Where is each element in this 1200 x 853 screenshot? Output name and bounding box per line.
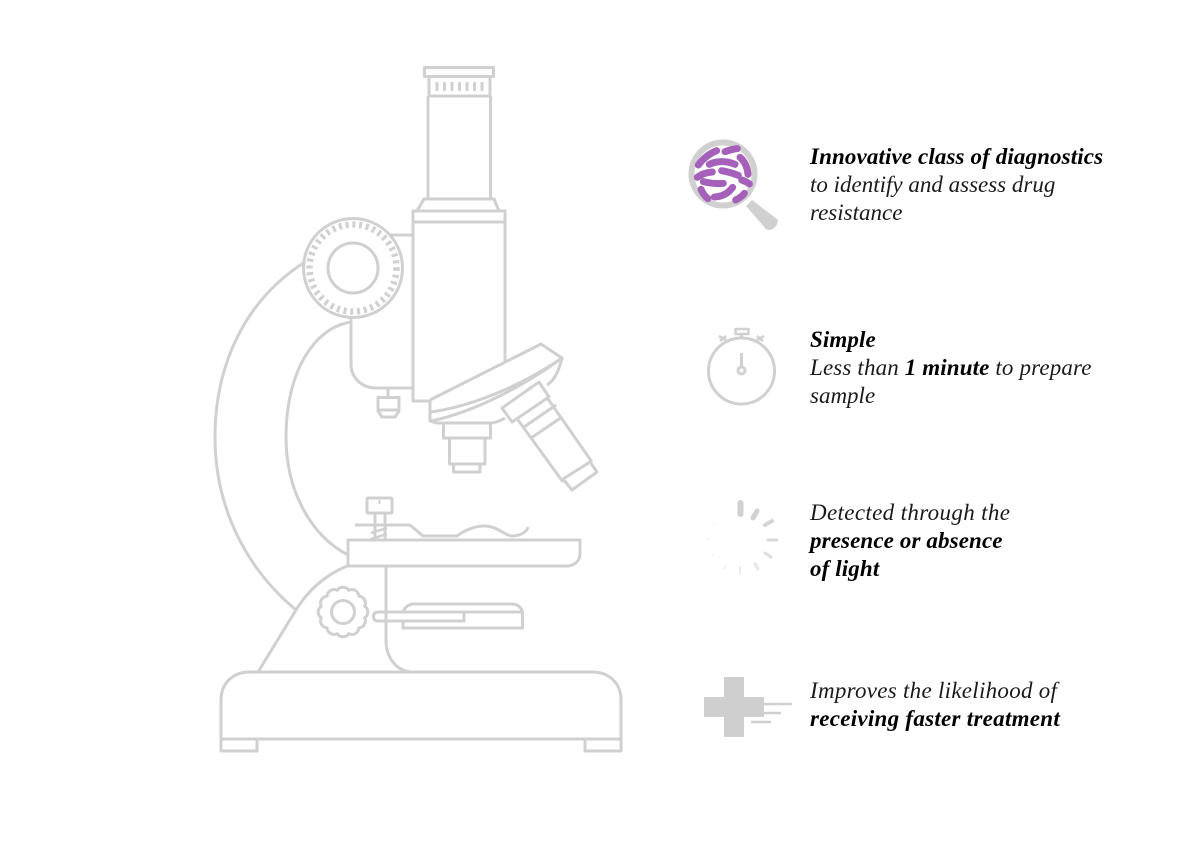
text: innovative class of diagnostics: resistance [810, 200, 902, 225]
icon: magnifier with bacteria [692, 142, 778, 230]
gear wheel [318, 587, 368, 637]
arm [215, 262, 413, 672]
text: detected through light: presence or absence [810, 528, 1003, 553]
icon: medical cross with speed lines [704, 677, 792, 737]
text: innovative class of diagnostics [810, 144, 1103, 225]
objective: angled [502, 382, 597, 490]
objective: vertical [444, 423, 490, 472]
stage [348, 540, 580, 566]
focus knob [304, 218, 413, 318]
text: simple: sample [810, 383, 875, 408]
text: detected through light [808, 500, 1010, 581]
text: simple: Less than 1 minute to prepare [810, 355, 1092, 380]
text: faster treatment: receiving faster treatment [810, 706, 1060, 731]
nosepiece [430, 344, 562, 423]
body tube [413, 199, 505, 401]
text: innovative class of diagnostics: Innovative class of diagnostics [810, 144, 1103, 169]
base [221, 672, 621, 751]
text: faster treatment: Improves the likelihood of [810, 678, 1057, 703]
text: detected through light: of light [810, 556, 879, 581]
eyepiece [424, 68, 494, 199]
text: simple [810, 327, 1092, 408]
stage clip [355, 498, 528, 540]
mirror lever [374, 604, 522, 628]
small knob [378, 388, 399, 417]
icon: loading spinner [707, 503, 777, 574]
text: detected through light: Detected through the [810, 500, 1010, 525]
text: simple: Simple [810, 327, 876, 352]
text: faster treatment [810, 678, 1060, 731]
text: innovative class of diagnostics: to identify and assess drug [810, 172, 1055, 197]
icon: stopwatch [708, 329, 774, 404]
microscope illustration [215, 68, 621, 751]
